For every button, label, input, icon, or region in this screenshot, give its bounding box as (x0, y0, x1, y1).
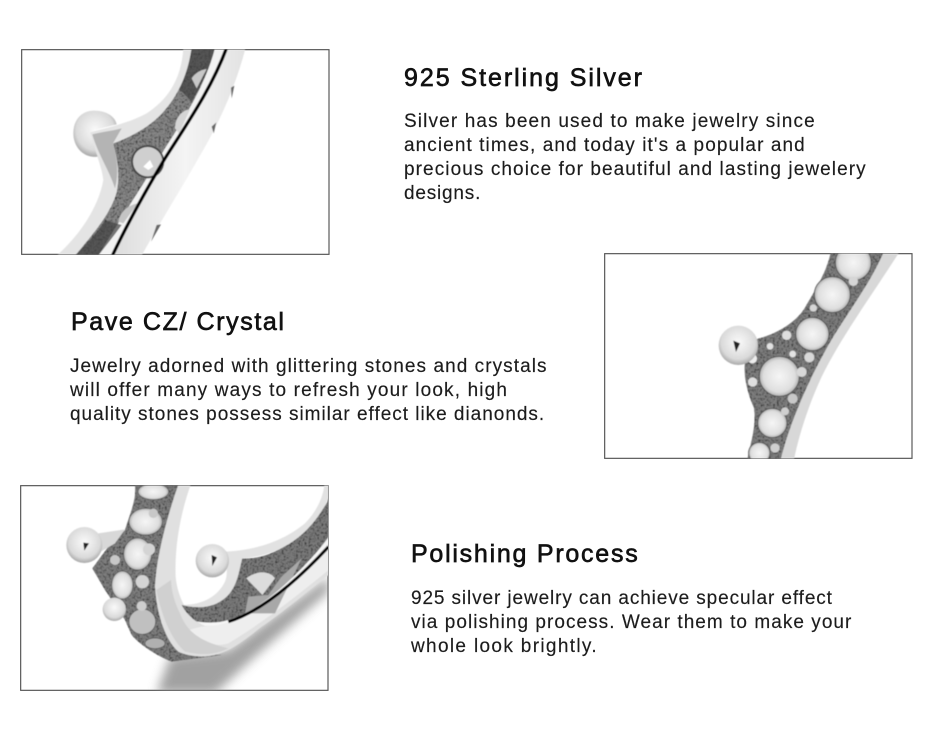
text: polishing description: whole look brightly. (411, 636, 598, 657)
text: crystal description: quality stones possess similar effect like dianonds. (70, 404, 545, 425)
white strip beside groove (97, 48, 228, 256)
black groove line (112, 48, 227, 256)
band shaded foot (156, 580, 228, 654)
channel stones (118, 69, 207, 223)
outer band (112, 48, 246, 256)
text: silver description: ancient times, and today it's a popular and (404, 135, 806, 156)
soft shadow (157, 577, 329, 693)
silver band (779, 253, 899, 460)
text: silver description: Silver has been used to make jewelry since (404, 111, 816, 132)
heading: 925 Sterling Silver: 925 Sterling Silver (404, 64, 644, 92)
panel: pave crystal ring photo (604, 253, 913, 459)
text: silver description (404, 111, 867, 204)
text: crystal description: Jewelry adorned with glittering stones and crystals (70, 356, 548, 377)
crystals (112, 484, 169, 649)
heading: Pave CZ/ Crystal: Pave CZ/ Crystal (71, 308, 286, 336)
rim white lip (197, 538, 329, 626)
text: polishing description (410, 588, 852, 657)
pave left arm (92, 485, 222, 662)
panel: polished ring photo (20, 485, 329, 691)
balls (66, 527, 102, 563)
rim shaded junction (92, 128, 122, 188)
inner rim (57, 48, 192, 256)
black groove (228, 547, 329, 622)
heading: Polishing Process: Polishing Process (411, 540, 639, 568)
pave body (745, 253, 883, 460)
text: crystal description (70, 356, 548, 425)
panel: sterling silver ring photo (21, 49, 330, 255)
polished band (155, 485, 329, 656)
ball (719, 326, 758, 365)
inner channel (182, 500, 329, 623)
dark pave channel (75, 48, 215, 256)
crystals (749, 245, 871, 464)
prongs (748, 277, 858, 453)
text: crystal description: will offer many ways to refresh your look, high (70, 380, 508, 401)
band highlight (188, 545, 329, 645)
text: silver description: designs. (404, 183, 481, 204)
text: polishing description: via polishing process. Wear them to make your (411, 612, 852, 633)
text: polishing description: 925 silver jewelry can achieve specular effect (411, 588, 833, 609)
channel stone (245, 558, 302, 613)
text: silver description: precious choice for beautiful and lasting jewelery (404, 159, 867, 180)
inner rim (182, 485, 329, 607)
prongs (110, 509, 158, 611)
left connector (98, 529, 124, 552)
ball (73, 111, 117, 157)
